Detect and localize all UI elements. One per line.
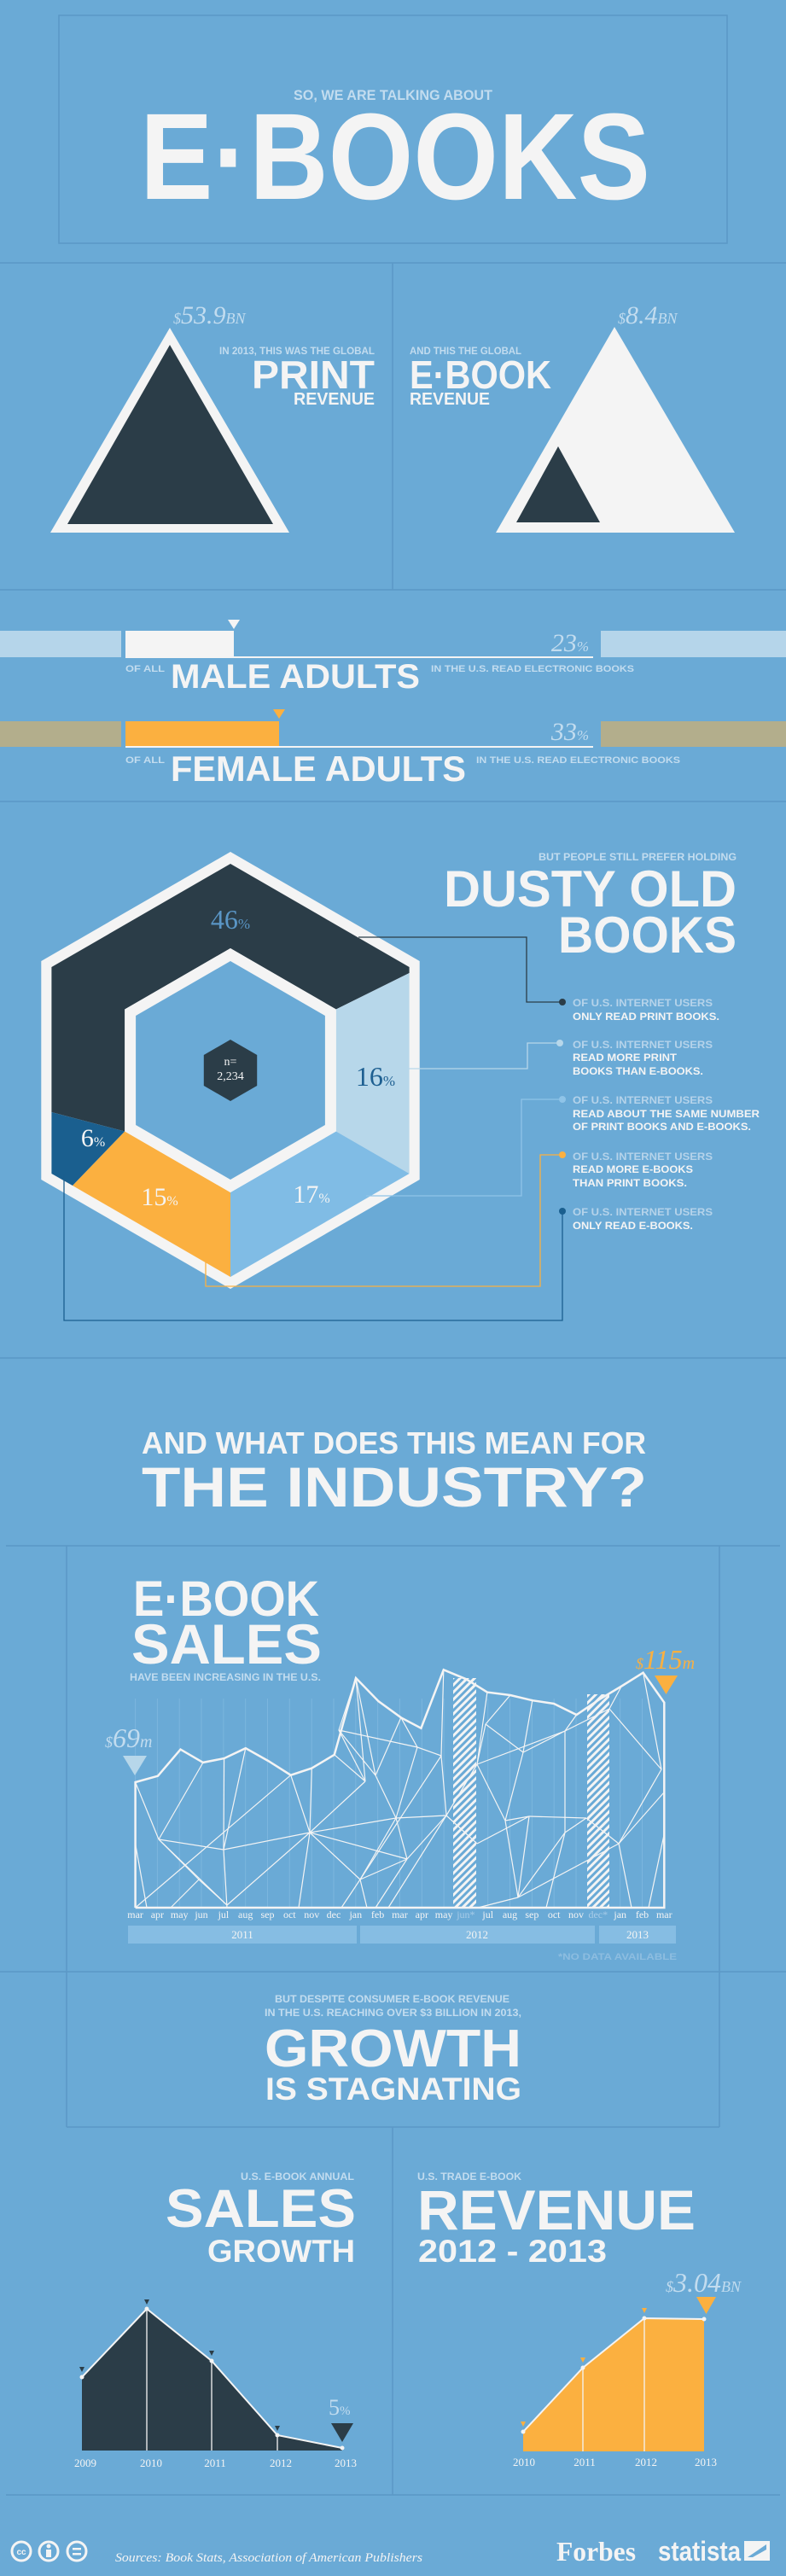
month axis: may xyxy=(171,1909,189,1920)
month axis: may xyxy=(435,1909,452,1920)
connector lines xyxy=(64,937,562,1320)
month axis: mar xyxy=(656,1909,672,1920)
bar: female adults: OF ALL xyxy=(125,755,165,766)
chart: ebook sales line mesh: 2011 xyxy=(231,1928,253,1941)
month axis: dec* xyxy=(588,1909,608,1920)
legend: ONLY READ PRINT BOOKS. xyxy=(573,1011,719,1023)
month axis: nov xyxy=(568,1909,584,1920)
legend: OF PRINT BOOKS AND E-BOOKS. xyxy=(573,1121,751,1133)
panel: trade revenue: REVENUE xyxy=(417,2178,696,2241)
heading: ebook sales xyxy=(130,1571,322,1683)
month axis: feb xyxy=(636,1909,649,1920)
print label: IN 2013, THIS WAS THE GLOBAL xyxy=(219,345,375,357)
area chart: revenue: 2013 xyxy=(695,2456,717,2468)
center sample size xyxy=(204,1040,257,1101)
month axis: nov xyxy=(304,1909,319,1920)
heading: industry: THE INDUSTRY? xyxy=(142,1455,647,1518)
panel: ebook revenue: REVENUE xyxy=(410,390,490,409)
bar: male adults: IN THE U.S. READ ELECTRONIC BOOKS xyxy=(431,664,634,674)
month axis: oct xyxy=(548,1909,561,1920)
panel: sales growth: GROWTH xyxy=(207,2234,355,2269)
icon: ebook triangle xyxy=(496,327,735,533)
heading: industry: AND WHAT DOES THIS MEAN FOR xyxy=(142,1425,646,1460)
panel: trade revenue: 2012 - 2013 xyxy=(418,2234,607,2269)
heading: ebook sales: SALES xyxy=(131,1612,322,1676)
footer xyxy=(12,2536,770,2567)
area chart: sales growth: 2011 xyxy=(204,2457,226,2469)
panel: sales growth xyxy=(74,2171,357,2469)
percent labels: 46% xyxy=(211,904,250,935)
heading: dusty old books: DUSTY OLD xyxy=(444,860,737,918)
legend: ONLY READ E-BOOKS. xyxy=(573,1220,693,1232)
legend xyxy=(556,997,760,1232)
area chart: sales growth: 5% xyxy=(329,2395,350,2420)
title block xyxy=(140,87,650,225)
heading: dusty old books: BOOKS xyxy=(558,906,737,964)
main title: E·BOOKS xyxy=(140,88,650,225)
month axis: jan xyxy=(613,1909,626,1920)
icon: creative commons xyxy=(12,2542,86,2561)
chart: hexagon donut xyxy=(41,852,420,1289)
month axis: mar xyxy=(392,1909,408,1920)
footer: cc xyxy=(16,2548,26,2557)
month axis: aug xyxy=(238,1909,253,1920)
month axis: sep xyxy=(261,1909,275,1920)
heading: ebook sales: HAVE BEEN INCREASING IN THE U.S. xyxy=(130,1671,321,1683)
bar: female adults: IN THE U.S. READ ELECTRONIC BOOKS xyxy=(476,755,680,766)
month axis: jun* xyxy=(456,1909,475,1920)
chart: hexagon donut: 16% xyxy=(356,1061,395,1092)
area chart: sales growth: 2009 xyxy=(74,2457,96,2469)
legend: BOOKS THAN E-BOOKS. xyxy=(573,1065,703,1077)
panel: print revenue xyxy=(50,301,375,533)
panel: sales growth: U.S. E-BOOK ANNUAL xyxy=(241,2171,354,2183)
legend: THAN PRINT BOOKS. xyxy=(573,1177,687,1189)
month axis: feb xyxy=(371,1909,384,1920)
month axis: apr xyxy=(151,1909,164,1920)
ebook value: $8.4BN xyxy=(618,301,678,329)
logo: forbes: Forbes xyxy=(556,2536,636,2567)
chart: ebook sales line mesh: 2013 xyxy=(626,1928,649,1941)
subtitle: SO, WE ARE TALKING ABOUT xyxy=(294,87,493,103)
legend: OF U.S. INTERNET USERS xyxy=(573,1206,713,1218)
heading: growth stagnating: IN THE U.S. REACHING OVER $3 BILLION IN 2013, xyxy=(265,2007,521,2019)
legend: OF U.S. INTERNET USERS xyxy=(573,1039,713,1051)
month axis: jul xyxy=(481,1909,494,1920)
legend: READ MORE E-BOOKS xyxy=(573,1163,693,1175)
month axis: jan xyxy=(348,1909,362,1920)
chart: hexagon donut: n= xyxy=(224,1056,237,1069)
chart: ebook sales line mesh xyxy=(105,1644,695,1962)
bar: female adults: FEMALE ADULTS xyxy=(171,749,466,789)
panel: print revenue: REVENUE xyxy=(294,390,375,409)
area chart: revenue: 2012 xyxy=(635,2456,657,2468)
legend: OF U.S. INTERNET USERS xyxy=(573,997,713,1009)
year axis xyxy=(128,1926,357,1944)
bar: male adults xyxy=(0,620,786,696)
legend: OF U.S. INTERNET USERS xyxy=(573,1151,713,1163)
bar: female adults: 33% xyxy=(550,718,589,746)
chart: ebook sales line mesh: *NO DATA AVAILABLE xyxy=(558,1952,677,1962)
heading: growth stagnating: GROWTH xyxy=(265,2019,521,2078)
start value: $69m xyxy=(105,1722,152,1753)
area chart: revenue: 2010 xyxy=(513,2456,535,2468)
heading: growth stagnating xyxy=(265,1993,521,2107)
area chart: revenue xyxy=(513,2267,742,2468)
panel: ebook revenue: E·BOOK xyxy=(410,353,551,397)
month axis: jun xyxy=(194,1909,208,1920)
legend: READ MORE PRINT xyxy=(573,1052,678,1064)
icon: print triangle xyxy=(50,328,289,533)
month axis: apr xyxy=(416,1909,428,1920)
heading: growth stagnating: BUT DESPITE CONSUMER E-BOOK REVENUE xyxy=(275,1993,509,2005)
chart: ebook sales line mesh: 2012 xyxy=(466,1928,488,1941)
month axis: aug xyxy=(503,1909,517,1920)
chart: hexagon donut: 2,234 xyxy=(217,1070,244,1083)
bar: male adults: MALE ADULTS xyxy=(171,658,420,696)
area chart: revenue: 2011 xyxy=(573,2456,596,2468)
chart: hexagon donut: 17% xyxy=(293,1180,330,1209)
heading: dusty old books xyxy=(444,851,737,964)
ebook label: AND THIS THE GLOBAL xyxy=(410,345,521,357)
print value: $53.9BN xyxy=(173,301,246,329)
month axis: oct xyxy=(283,1909,296,1920)
bar: male adults: 23% xyxy=(551,629,589,657)
panel: print revenue: PRINT xyxy=(252,353,375,397)
panel: ebook revenue xyxy=(410,301,735,533)
month axis xyxy=(127,1909,672,1920)
logo: statista: statista xyxy=(658,2536,741,2567)
heading: dusty old books: BUT PEOPLE STILL PREFER HOLDING xyxy=(539,851,737,863)
area chart: revenue: $3.04BN xyxy=(666,2267,742,2298)
heading: growth stagnating: IS STAGNATING xyxy=(265,2072,521,2107)
sources: Sources: Book Stats, Association of American Publishers xyxy=(115,2551,422,2565)
chart: hexagon donut: 15% xyxy=(141,1183,178,1211)
area chart: sales growth xyxy=(74,2299,357,2469)
area chart: sales growth: 2010 xyxy=(140,2457,162,2469)
panel: trade revenue: U.S. TRADE E-BOOK xyxy=(417,2171,521,2183)
bar: male adults: OF ALL xyxy=(125,664,165,674)
heading: ebook sales: E·BOOK xyxy=(133,1571,319,1627)
panel: sales growth: SALES xyxy=(166,2179,356,2239)
end value: $115m xyxy=(636,1644,695,1675)
bar: female adults xyxy=(0,709,786,789)
month axis: jul xyxy=(218,1909,230,1920)
month axis: dec xyxy=(327,1909,341,1920)
month axis: sep xyxy=(525,1909,539,1920)
heading: industry xyxy=(142,1425,647,1518)
legend: READ ABOUT THE SAME NUMBER xyxy=(573,1108,760,1120)
panel: trade revenue xyxy=(417,2171,742,2468)
chart: hexagon donut: 6% xyxy=(81,1124,105,1152)
month axis: mar xyxy=(127,1909,143,1920)
legend: OF U.S. INTERNET USERS xyxy=(573,1094,713,1106)
area chart: sales growth: 2012 xyxy=(270,2457,292,2469)
area chart: sales growth: 2013 xyxy=(335,2457,357,2469)
